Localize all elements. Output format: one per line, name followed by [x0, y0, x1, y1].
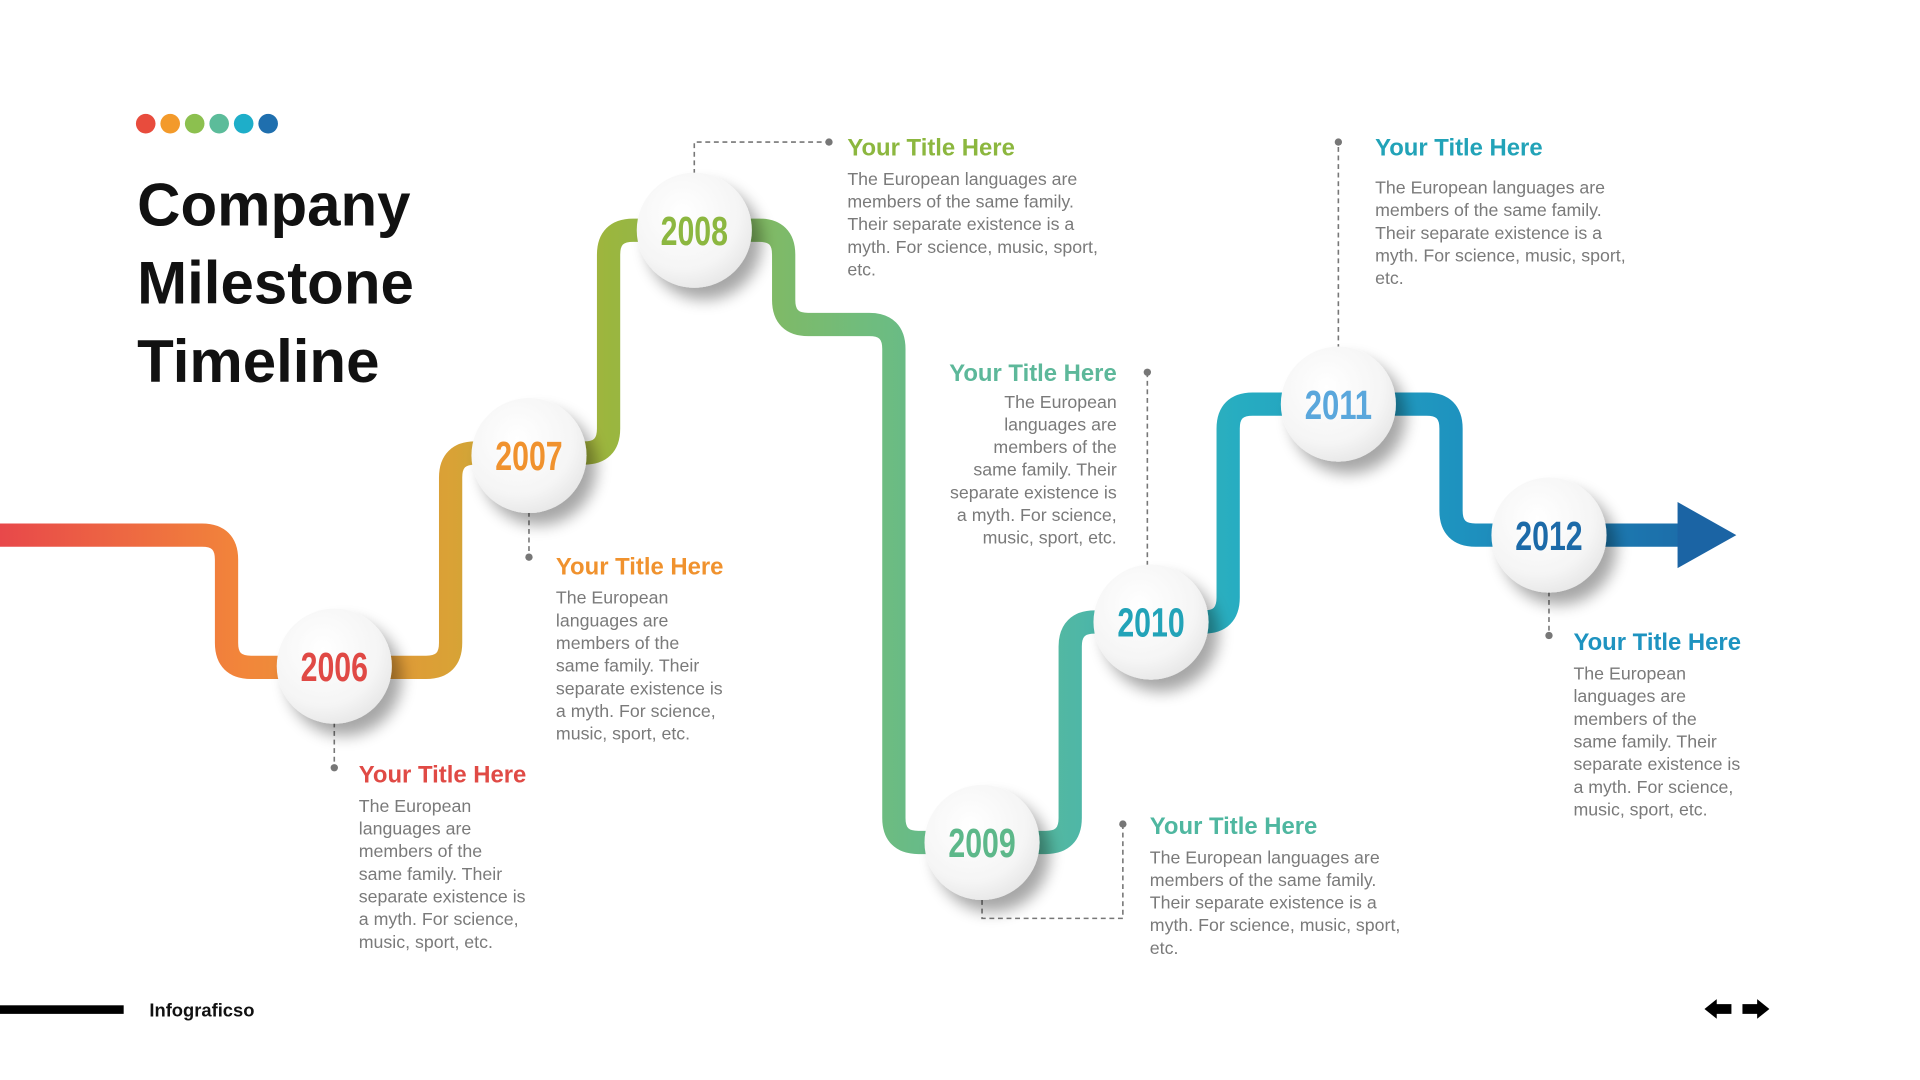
text: 2012: languages are [1573, 686, 1686, 706]
text: 2008: Their separate existence is a [847, 214, 1074, 234]
text: 2008: The European languages are [847, 169, 1077, 189]
text: 2012: Your Title Here [1573, 629, 1741, 656]
text: 2008: members of the same family. [847, 192, 1074, 212]
text: 2009: The European languages are [1150, 847, 1380, 867]
text: 2009: myth. For science, music, sport, [1150, 915, 1400, 935]
arrow head [1678, 502, 1736, 568]
text: 2007: The European [556, 588, 668, 608]
text: 2011: myth. For science, music, sport, [1375, 245, 1626, 265]
text: 2011: etc. [1375, 268, 1404, 288]
milestone 2006: 2006 [301, 644, 368, 690]
title: Company [137, 171, 411, 238]
text: 2007: music, sport, etc. [556, 724, 690, 744]
dashed connectors [334, 142, 1549, 918]
text: 2008: myth. For science, music, sport, [847, 237, 1098, 257]
text: 2011: Their separate existence is a [1375, 223, 1602, 243]
text: 2009: Their separate existence is a [1150, 893, 1377, 913]
text: 2006: a myth. For science, [359, 909, 519, 929]
text: 2006: members of the [359, 841, 482, 861]
text: 2007 [556, 553, 723, 744]
text: 2008 [847, 135, 1098, 280]
text: 2006: same family. Their [359, 864, 502, 884]
text: 2010: a myth. For science, [957, 505, 1117, 525]
text: 2007: languages are [556, 610, 669, 630]
milestone 2008 [637, 173, 752, 288]
text: 2010: separate existence is [950, 482, 1117, 502]
text: 2012: music, sport, etc. [1573, 800, 1708, 820]
text: 2007: members of the [556, 633, 679, 653]
milestone 2007 [471, 398, 587, 513]
text: 2012: The European [1573, 664, 1686, 684]
text: 2010 [949, 360, 1117, 548]
text: 2006: languages are [359, 818, 471, 838]
text: 2012: separate existence is [1573, 754, 1740, 774]
title: Timeline [137, 328, 379, 395]
color dots [136, 114, 278, 133]
text: 2010: same family. Their [973, 460, 1117, 480]
text: 2008: etc. [847, 260, 876, 280]
milestone 2007: 2007 [495, 433, 563, 479]
text: 2010: music, sport, etc. [983, 528, 1117, 548]
nav arrows [1704, 999, 1769, 1019]
text: 2012: members of the [1573, 709, 1697, 729]
text: 2009 [1150, 813, 1400, 958]
text: 2007: Your Title Here [556, 553, 723, 580]
text: 2011: The European languages are [1375, 177, 1605, 197]
milestone 2008: 2008 [661, 208, 728, 254]
milestone 2009 [924, 785, 1040, 900]
title: Milestone [137, 250, 414, 317]
text: 2010: Your Title Here [949, 360, 1117, 387]
title [137, 171, 414, 395]
timeline path [0, 230, 1684, 842]
text: 2011 [1375, 135, 1626, 288]
text: 2006 [359, 761, 526, 952]
text: 2007: a myth. For science, [556, 701, 716, 721]
text: 2011: Your Title Here [1375, 135, 1543, 162]
milestone 2006 [277, 609, 392, 724]
milestone 2011 [1281, 347, 1396, 462]
text: 2007: same family. Their [556, 656, 699, 676]
text: 2006: The European [359, 796, 471, 816]
text: 2011: members of the same family. [1375, 200, 1602, 220]
footer brand: Infograficso [149, 999, 254, 1020]
text: 2007: separate existence is [556, 678, 723, 698]
text: 2006: Your Title Here [359, 761, 526, 788]
text: 2009: members of the same family. [1150, 870, 1376, 890]
milestone 2010 [1093, 564, 1209, 680]
text: 2012: same family. Their [1573, 732, 1717, 752]
text: 2009: etc. [1150, 938, 1178, 958]
text: 2012 [1573, 629, 1741, 820]
text: 2006: separate existence is [359, 886, 526, 906]
milestone 2011: 2011 [1305, 382, 1372, 428]
text: 2008: Your Title Here [847, 135, 1015, 162]
text: 2012: a myth. For science, [1573, 777, 1733, 797]
milestone 2009: 2009 [948, 820, 1016, 866]
milestone 2012: 2012 [1515, 513, 1583, 559]
milestone 2012 [1491, 478, 1607, 593]
text: 2006: music, sport, etc. [359, 932, 493, 952]
milestone 2010: 2010 [1117, 600, 1185, 646]
text: 2010: members of the [993, 437, 1117, 457]
text: 2009: Your Title Here [1150, 813, 1317, 840]
text: 2010: languages are [1004, 414, 1117, 434]
text: 2010: The European [1004, 392, 1117, 412]
footer bar [0, 1005, 124, 1014]
